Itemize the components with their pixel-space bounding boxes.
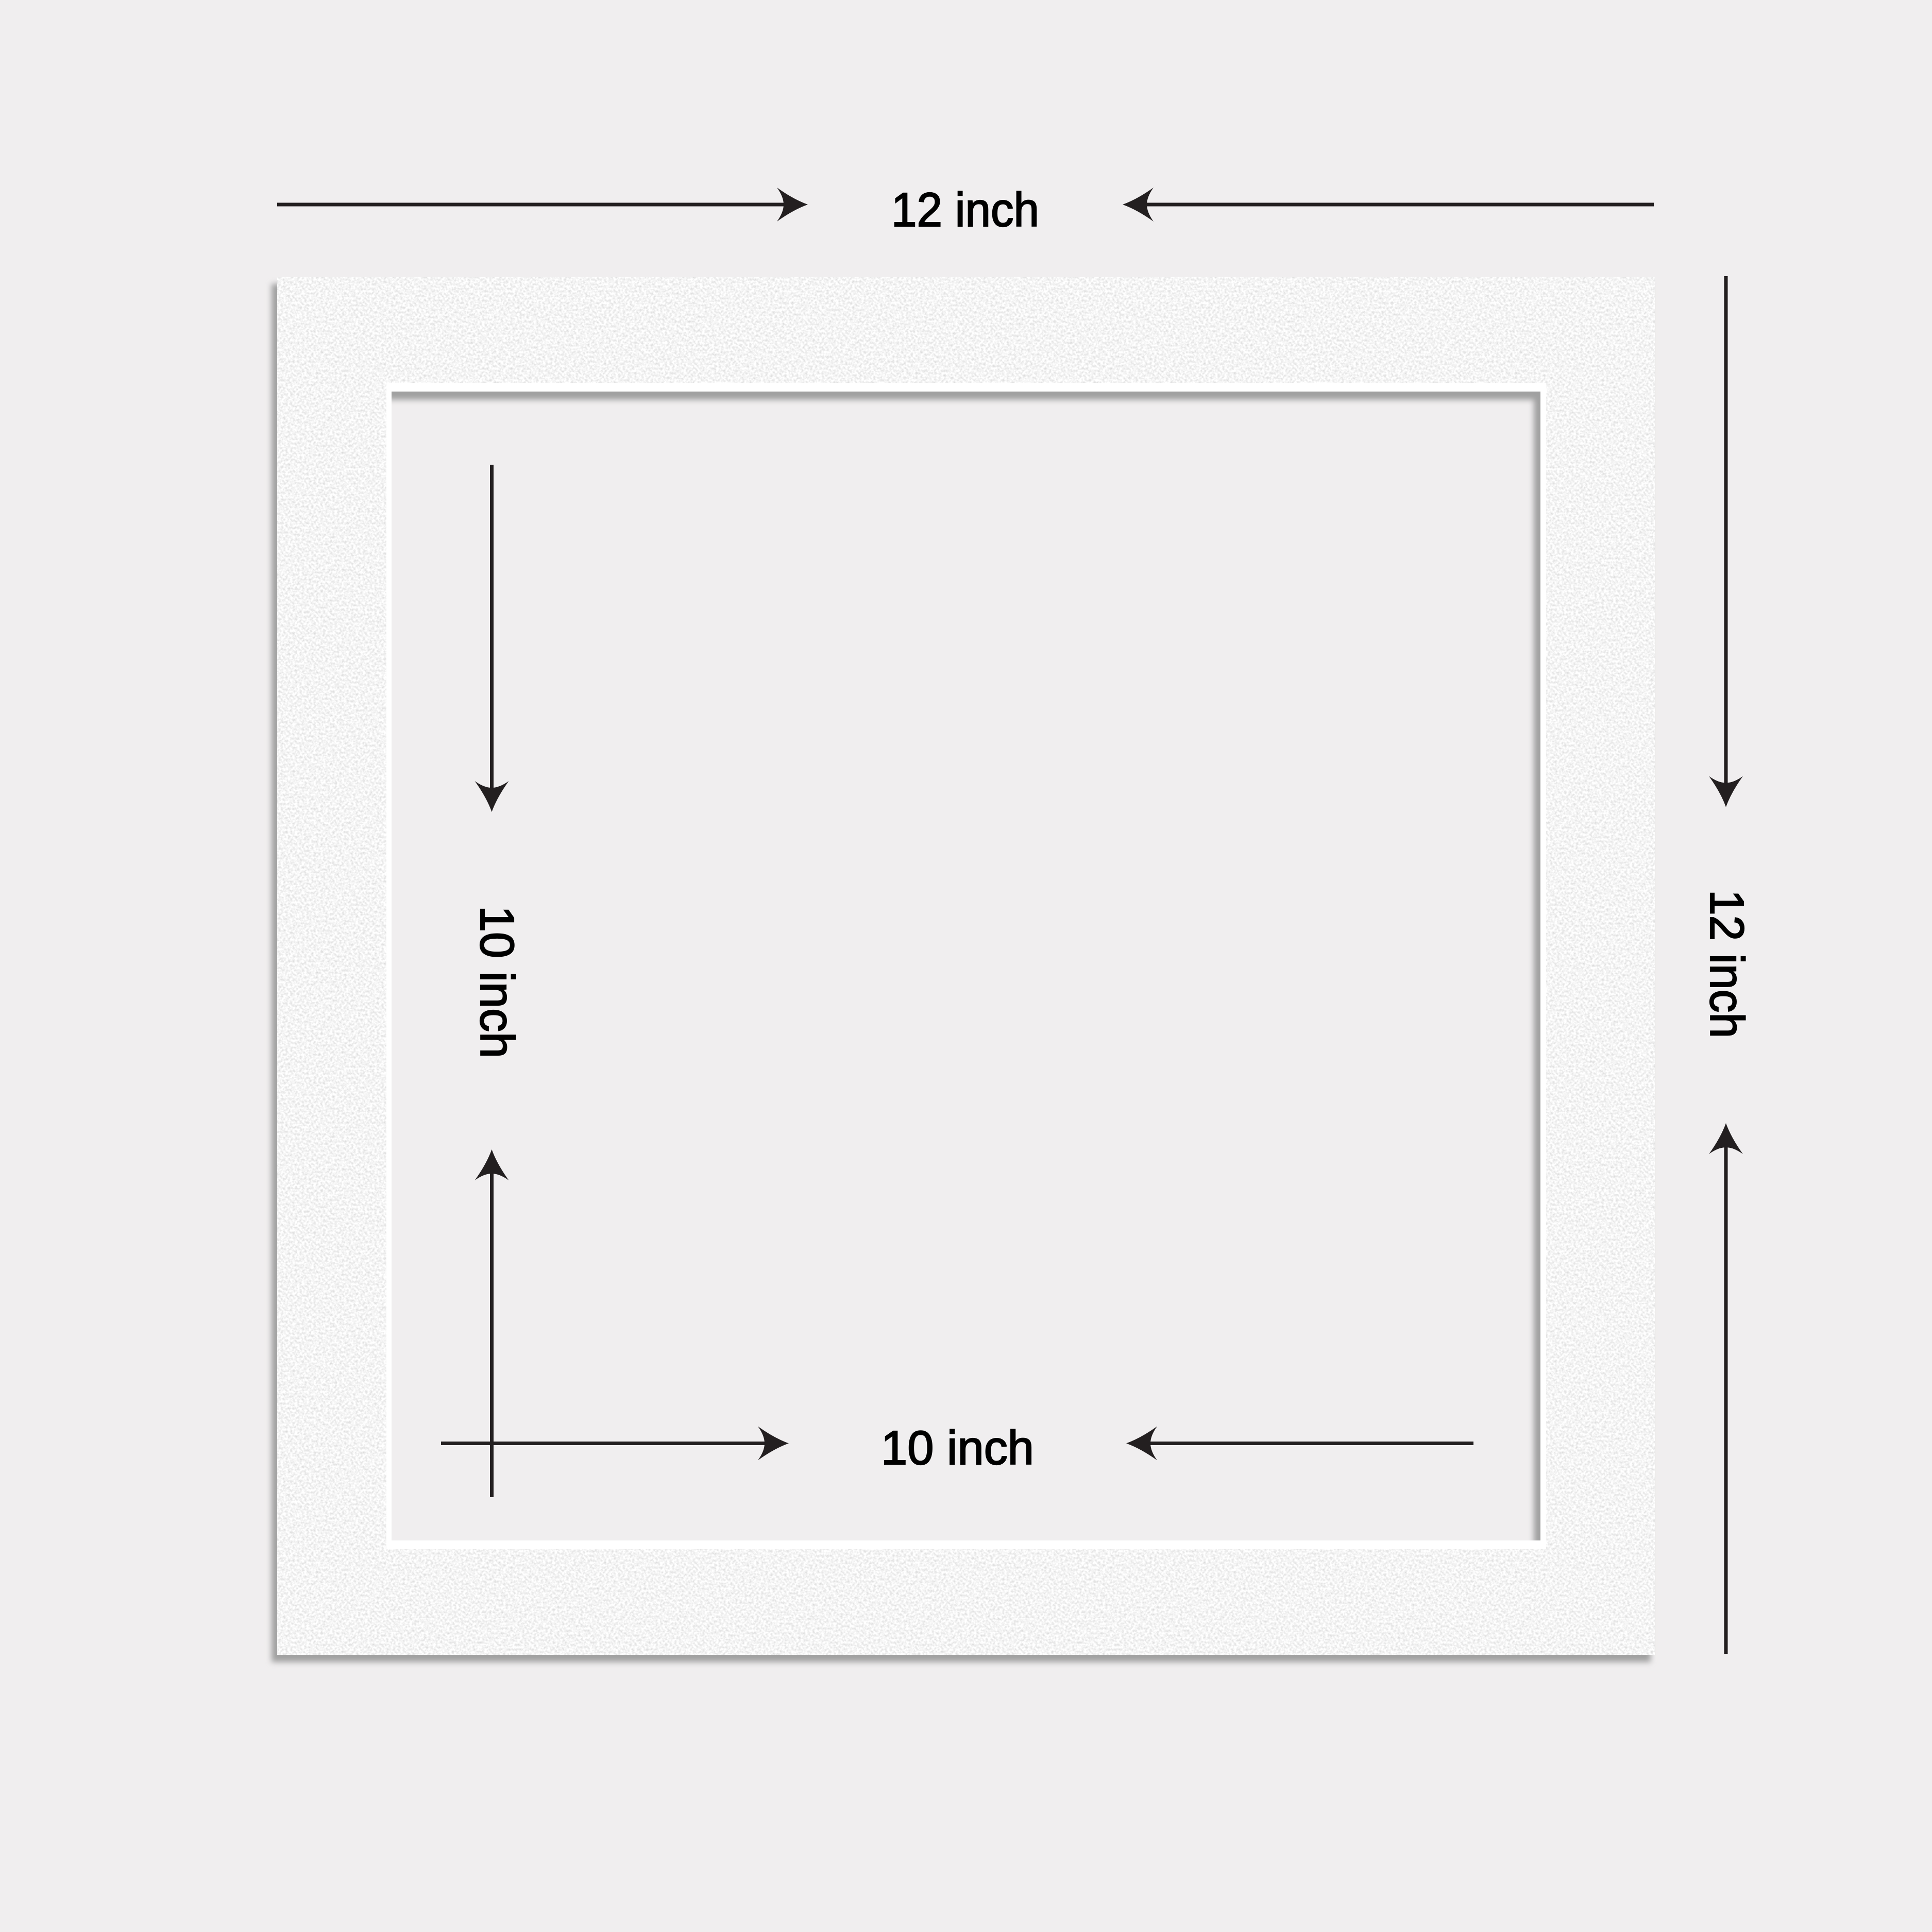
window opening [392, 392, 1540, 1540]
arrow: top left pointing right [277, 188, 808, 222]
right dimension: 12 inch [1700, 276, 1754, 1654]
label: top 12 inch: 12 inch [891, 183, 1039, 236]
mat board with paper texture [277, 277, 1655, 1655]
left dimension: 10 inch [470, 465, 524, 1497]
panel: white photo mat [272, 277, 1655, 1662]
arrow: bottom left pointing right [441, 1426, 789, 1460]
label: right 12 inch: 12 inch [1700, 890, 1754, 1038]
arrow: right lower pointing up [1709, 1123, 1743, 1654]
arrow: left lower pointing up [475, 1149, 509, 1497]
bottom dimension: 10 inch [441, 1421, 1473, 1475]
label: left 10 inch: 10 inch [470, 906, 524, 1058]
bevelled window edge [386, 383, 1546, 1549]
arrow: top right pointing left [1123, 188, 1654, 222]
window inner shadow [392, 392, 1540, 1540]
arrow: right upper pointing down [1709, 276, 1743, 807]
arrow: left upper pointing down [475, 465, 509, 812]
arrow: bottom right pointing left [1126, 1426, 1473, 1460]
mat outer drop shadow [272, 284, 1651, 1662]
label: bottom 10 inch: 10 inch [881, 1421, 1034, 1475]
top dimension: 12 inch [277, 183, 1654, 236]
